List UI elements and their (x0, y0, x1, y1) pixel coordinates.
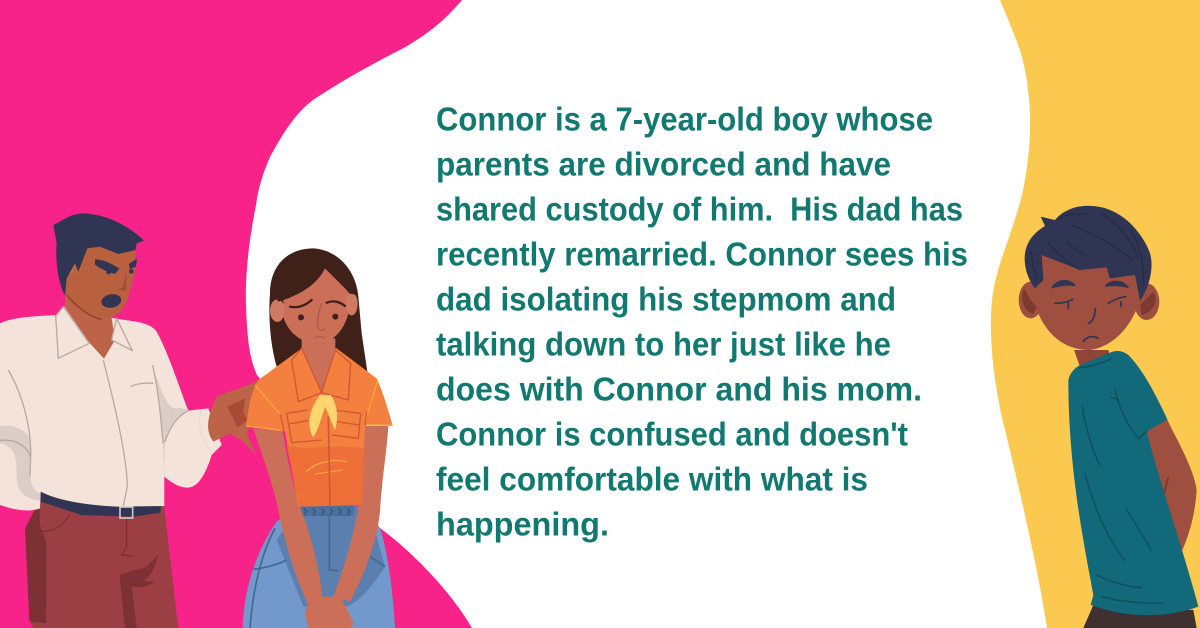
teal t-shirt (1068, 351, 1198, 615)
head (1019, 253, 1159, 353)
arm behind back (1140, 418, 1197, 552)
hand on shoulder (208, 377, 263, 455)
character: sad stepmother (243, 248, 395, 628)
white shirt (0, 307, 222, 510)
face (270, 268, 358, 344)
panel: yellow background shape (991, 0, 1200, 628)
panel: pink background shape (0, 0, 472, 628)
main story text: happening. (436, 506, 609, 542)
clasped hands (305, 597, 354, 628)
blouse collar (292, 348, 351, 402)
trousers (25, 500, 178, 628)
shirt collar (56, 307, 132, 358)
main story text (436, 100, 968, 542)
main story text: dad isolating his stepmom and (436, 280, 896, 318)
main story text: Connor is a 7-year-old boy whose (436, 100, 933, 138)
dark trousers (1083, 605, 1197, 628)
yellow neck scarf (309, 395, 337, 437)
jeans (243, 504, 395, 628)
neck and chest (65, 290, 115, 359)
boy hair (1025, 206, 1152, 301)
hair fringe (272, 249, 357, 302)
main story text: parents are divorced and have (436, 146, 891, 182)
long dark hair (269, 248, 367, 372)
right arm (333, 426, 388, 602)
neck (302, 338, 335, 393)
main story text: recently remarried. Connor sees his (436, 236, 968, 272)
orange blouse (246, 348, 393, 507)
hair (53, 213, 144, 296)
main story text: Connor is confused and doesn't (436, 416, 908, 452)
facial features (1052, 280, 1129, 342)
character: angry father (0, 213, 395, 628)
main story text: shared custody of him. His dad has (436, 190, 963, 228)
head (63, 247, 137, 319)
main story text: feel comfortable with what is (436, 460, 868, 498)
main story text: talking down to her just like he (436, 326, 891, 362)
main story text: does with Connor and his mom. (436, 370, 922, 408)
hair strands (1032, 213, 1144, 285)
character: confused boy (1019, 206, 1198, 628)
neck (1074, 350, 1110, 367)
left arm (253, 428, 323, 605)
belt (41, 492, 161, 518)
